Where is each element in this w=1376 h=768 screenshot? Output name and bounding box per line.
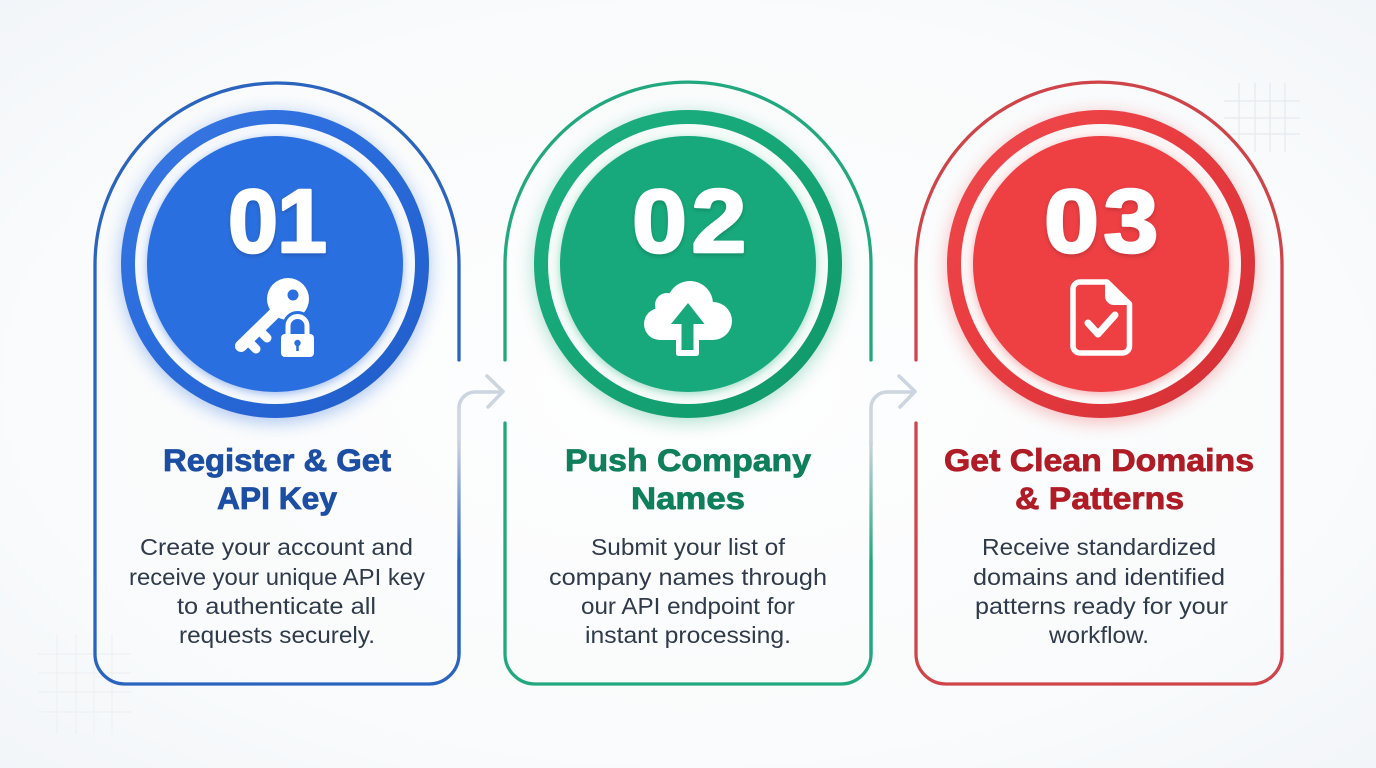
decorative grid: bottom left [38, 634, 131, 734]
badge: step 1 [121, 110, 429, 422]
number: 03: 03 [1044, 171, 1158, 272]
icon: document check [1073, 282, 1130, 353]
decorative grid: top right [1224, 83, 1300, 152]
badge: step 2 [534, 110, 842, 422]
panel: step 1 [95, 83, 459, 684]
description: step 2: Submit your list of [591, 534, 785, 560]
number: 01: 01 [228, 172, 327, 272]
heading: step 3: Get Clean Domains [944, 442, 1254, 478]
heading: step 3: & Patterns [1015, 480, 1184, 516]
icon: cloud upload [644, 281, 732, 356]
description: step 2: our API endpoint for [581, 593, 795, 619]
heading: step 3 [944, 442, 1254, 516]
heading: step 1: Register & Get [163, 442, 392, 478]
card outline: step 3 [916, 82, 1282, 684]
description: step 1: Create your account and [140, 534, 413, 560]
description: step 1: requests securely. [179, 622, 375, 648]
heading: step 2: Names [631, 480, 745, 516]
card outline: step 1 [95, 83, 459, 684]
description: step 3 [973, 534, 1228, 648]
number: 02: 02 [632, 171, 746, 272]
description: step 1: to authenticate all [177, 593, 376, 619]
description: step 1: receive your unique API key [129, 564, 425, 590]
description: step 3: workflow. [1048, 622, 1149, 648]
description: step 3: patterns ready for your [975, 593, 1228, 619]
description: step 1 [129, 534, 425, 648]
card outline: step 2 [505, 82, 871, 684]
description: step 2 [549, 534, 827, 648]
arrow: step 1 to step 2 [459, 376, 503, 445]
panel: step 3 [916, 82, 1282, 684]
panel: step 2 [505, 82, 871, 684]
description: step 2: company names through [549, 564, 827, 590]
heading: step 2 [565, 442, 812, 516]
heading: step 2: Push Company [565, 442, 812, 478]
arrow: step 2 to step 3 [871, 376, 915, 445]
heading: step 1 [163, 442, 392, 516]
description: step 3: domains and identified [973, 564, 1225, 590]
badge: step 3 [947, 110, 1255, 422]
icon: key and lock [241, 278, 314, 357]
description: step 3: Receive standardized [982, 534, 1216, 560]
heading: step 1: API Key [217, 480, 337, 516]
description: step 2: instant processing. [585, 622, 791, 648]
